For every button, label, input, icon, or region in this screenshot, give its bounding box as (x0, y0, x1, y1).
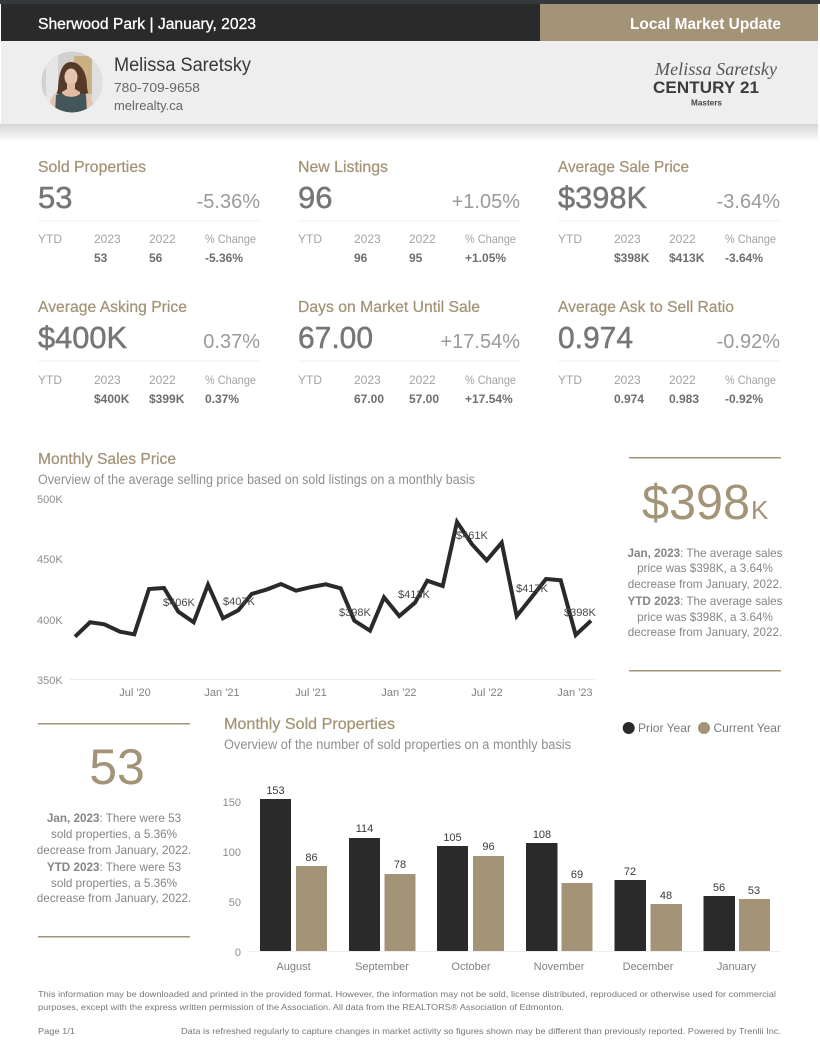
panel: new listings: 96 (298, 180, 332, 215)
header location and date: Sherwood Park | January, 2023 (38, 16, 256, 33)
panel: average asking price: $400K (94, 392, 130, 406)
header report name: Local Market Update (630, 16, 781, 33)
bars: October (437, 832, 504, 973)
panel: new listings: New Listings (298, 159, 388, 176)
panel: average ask to sell ratio: 2023 (614, 373, 641, 387)
heading: monthly sold properties: Monthly Sold Properties (224, 716, 395, 733)
bars: October: 105 (443, 832, 462, 844)
bar chart: monthly sold properties (223, 785, 781, 973)
bars: October: October (451, 961, 491, 973)
bars: August: 153 (266, 785, 285, 797)
panel: new listings: % Change (465, 232, 516, 246)
subheading: monthly sales price: Overview of the average selling price based on sold listings on a monthly basis (38, 472, 475, 487)
panel: new listings: YTD (298, 232, 322, 246)
panel: average asking price: 2022 (149, 373, 176, 387)
bars: November: 108 (533, 829, 551, 841)
icon: agent portrait (41, 51, 103, 113)
bars: September: September (355, 961, 409, 973)
agent phone: 780-709-9658 (114, 80, 200, 95)
panel: average ask to sell ratio: -0.92% (717, 331, 780, 353)
line chart: monthly sales price: $398K (339, 607, 371, 619)
callout: sold properties: Jan, 2023: There were 53 (47, 812, 181, 825)
bars: September (349, 823, 416, 973)
panel: sold properties: -5.36% (205, 251, 243, 265)
callout: average sale price: decrease from January, 2022. (628, 626, 782, 639)
bars: December (614, 866, 682, 973)
panel: average asking price: 2023 (94, 373, 121, 387)
bars: November (526, 829, 592, 973)
bars: September: 114 (356, 823, 373, 835)
panel: average ask to sell ratio: 2022 (669, 373, 696, 387)
callout: average sale price (627, 457, 783, 672)
panel: average ask to sell ratio (558, 299, 780, 406)
panel: average sale price: -3.64% (717, 191, 780, 213)
line chart: monthly sales price: Jul '22 (471, 687, 503, 699)
bars: August: August (276, 961, 311, 973)
bar chart: monthly sold properties: 100 (223, 847, 241, 859)
bars: December: 72 (624, 866, 636, 878)
line chart: monthly sales price: 350K (37, 675, 63, 687)
bars: December: December (623, 961, 674, 973)
panel: sold properties (38, 159, 260, 265)
panel: average sale price: $398K (558, 180, 647, 215)
brokerage logo (653, 59, 777, 108)
callout: sold properties (37, 723, 191, 938)
panel: average ask to sell ratio: 0.983 (669, 392, 699, 406)
bars: January: January (717, 961, 757, 973)
panel: average sale price: $398K (614, 251, 650, 265)
panel: new listings: 95 (409, 251, 423, 265)
bars: September: 78 (394, 859, 406, 871)
panel: average asking price: Average Asking Price (38, 299, 187, 316)
panel: average ask to sell ratio: 0.974 (558, 320, 633, 355)
footer disclaimer: purposes, except with the express written permission of the Association. All data from the REALTORS® Association of Edmonton. (38, 1002, 564, 1012)
line chart: monthly sales price: $398K (564, 607, 596, 619)
panel: new listings: 2023 (354, 232, 381, 246)
bars: December: 48 (660, 890, 672, 902)
panel: days on market until sale: +17.54% (440, 331, 520, 353)
panel: days on market until sale: % Change (465, 373, 516, 387)
callout: average sale price: Jan, 2023: The average sales (627, 547, 783, 560)
panel: days on market until sale: 57.00 (409, 392, 439, 406)
line chart: monthly sales price: $461K (456, 530, 488, 542)
panel: average ask to sell ratio: Average Ask to Sell Ratio (558, 299, 734, 316)
panel: days on market until sale: 67.00 (298, 320, 373, 355)
callout: average sale price: K (751, 495, 769, 525)
bar chart: monthly sold properties: 0 (235, 947, 241, 959)
panel: average ask to sell ratio: 0.974 (614, 392, 644, 406)
legend: Prior Year (638, 721, 691, 735)
line chart: monthly sales price: $413K (398, 589, 430, 601)
line chart: monthly sales price: $406K (163, 597, 195, 609)
brokerage logo: CENTURY 21 (653, 78, 759, 97)
footer disclaimer (38, 989, 776, 1012)
line chart: monthly sales price: $417K (516, 583, 548, 595)
agent band (0, 41, 818, 142)
line chart: monthly sales price: 400K (37, 615, 63, 627)
panel: average sale price: $413K (669, 251, 705, 265)
panel: new listings (298, 159, 520, 265)
panel: days on market until sale: 67.00 (354, 392, 384, 406)
panel: days on market until sale (298, 299, 520, 406)
panel: new listings: 96 (354, 251, 368, 265)
panel: sold properties: 53 (94, 251, 108, 265)
top header bar (0, 0, 820, 41)
line chart: monthly sales price: $407K (223, 596, 255, 608)
line chart: monthly sales price: Jul '21 (295, 687, 327, 699)
callout: sold properties: decrease from January, 2022. (37, 892, 191, 905)
footer disclaimer: This information may be downloaded and printed in the provided format. However, the information may not be sold, license distributed, reproduced or otherwise used for commercial (38, 989, 776, 999)
legend: Current Year (714, 721, 781, 735)
legend (623, 721, 781, 735)
callout: average sale price: YTD 2023: The average sales (627, 595, 783, 608)
panel: average sale price: 2023 (614, 232, 641, 246)
panel: sold properties: Sold Properties (38, 159, 146, 176)
panel: average sale price: 2022 (669, 232, 696, 246)
agent name: Melissa Saretsky (114, 55, 251, 76)
panel: sold properties: 53 (38, 180, 72, 215)
panel: average sale price: % Change (725, 232, 776, 246)
bars: January: 53 (748, 885, 760, 897)
heading: monthly sales price: Monthly Sales Price (38, 451, 176, 468)
panel: average sale price (558, 159, 780, 265)
panel: sold properties: -5.36% (197, 191, 260, 213)
panel: average sale price: Average Sale Price (558, 159, 689, 176)
panel: days on market until sale: 2022 (409, 373, 436, 387)
panel: average sale price: -3.64% (725, 251, 763, 265)
panel: average asking price (38, 299, 260, 406)
callout: average sale price: price was $398K, a 3.64% (637, 611, 773, 624)
bars: January (704, 882, 770, 973)
panel: new listings: +1.05% (452, 191, 520, 213)
callout: sold properties: 53 (89, 739, 145, 795)
panel: sold properties: 56 (149, 251, 163, 265)
bars: November: 69 (571, 869, 583, 881)
panel: average asking price: $399K (149, 392, 185, 406)
bars: November: November (534, 961, 585, 973)
agent website: melrealty.ca (114, 98, 184, 113)
callout: average sale price: $398 (642, 476, 750, 530)
panel: average asking price: 0.37% (205, 392, 239, 406)
bar chart: monthly sold properties: 50 (229, 897, 241, 909)
panel: average ask to sell ratio: % Change (725, 373, 776, 387)
bars: August: 86 (305, 852, 318, 864)
line chart: monthly sales price: Jan '21 (204, 687, 240, 699)
footer page number: Page 1/1 (38, 1026, 75, 1036)
callout: sold properties: YTD 2023: There were 53 (47, 861, 181, 874)
brokerage logo: Masters (691, 98, 722, 108)
bars: October: 96 (482, 841, 495, 853)
callout: average sale price: decrease from January, 2022. (628, 578, 782, 591)
callout: average sale price: price was $398K, a 3.64% (637, 562, 773, 575)
footer data note: Data is refreshed regularly to capture changes in market activity so figures shown may be different than previously reported. Powered by Trenlii Inc. (181, 1026, 781, 1036)
subheading: monthly sold properties: Overview of the number of sold properties on a monthly basis (224, 737, 571, 752)
callout: sold properties: sold properties, a 5.36% (51, 877, 177, 890)
panel: average asking price: $400K (38, 320, 127, 355)
panel: days on market until sale: 2023 (354, 373, 381, 387)
bars: August (260, 785, 327, 973)
panel: average asking price: 0.37% (203, 331, 260, 353)
panel: new listings: +1.05% (465, 251, 506, 265)
panel: new listings: 2022 (409, 232, 436, 246)
panel: average asking price: YTD (38, 373, 62, 387)
callout: sold properties: decrease from January, 2022. (37, 844, 191, 857)
line chart: monthly sales price: 500K (37, 494, 63, 506)
panel: sold properties: 2023 (94, 232, 121, 246)
line chart: monthly sales price (37, 494, 596, 699)
panel: average asking price: % Change (205, 373, 256, 387)
bar chart: monthly sold properties: 150 (223, 797, 241, 809)
panel: average ask to sell ratio: -0.92% (725, 392, 763, 406)
panel: sold properties: % Change (205, 232, 256, 246)
line chart: monthly sales price: Jan '23 (557, 687, 593, 699)
line chart: monthly sales price: 450K (37, 554, 63, 566)
callout: sold properties: sold properties, a 5.36% (51, 828, 177, 841)
line chart: monthly sales price: Jul '20 (119, 687, 151, 699)
panel: sold properties: YTD (38, 232, 62, 246)
brokerage logo: Melissa Saretsky (654, 59, 777, 79)
panel: average sale price: YTD (558, 232, 582, 246)
panel: days on market until sale: YTD (298, 373, 322, 387)
panel: average ask to sell ratio: YTD (558, 373, 582, 387)
panel: sold properties: 2022 (149, 232, 176, 246)
panel: days on market until sale: Days on Market Until Sale (298, 299, 480, 316)
bars: January: 56 (713, 882, 725, 894)
line chart: monthly sales price: Jan '22 (381, 687, 417, 699)
panel: days on market until sale: +17.54% (465, 392, 513, 406)
